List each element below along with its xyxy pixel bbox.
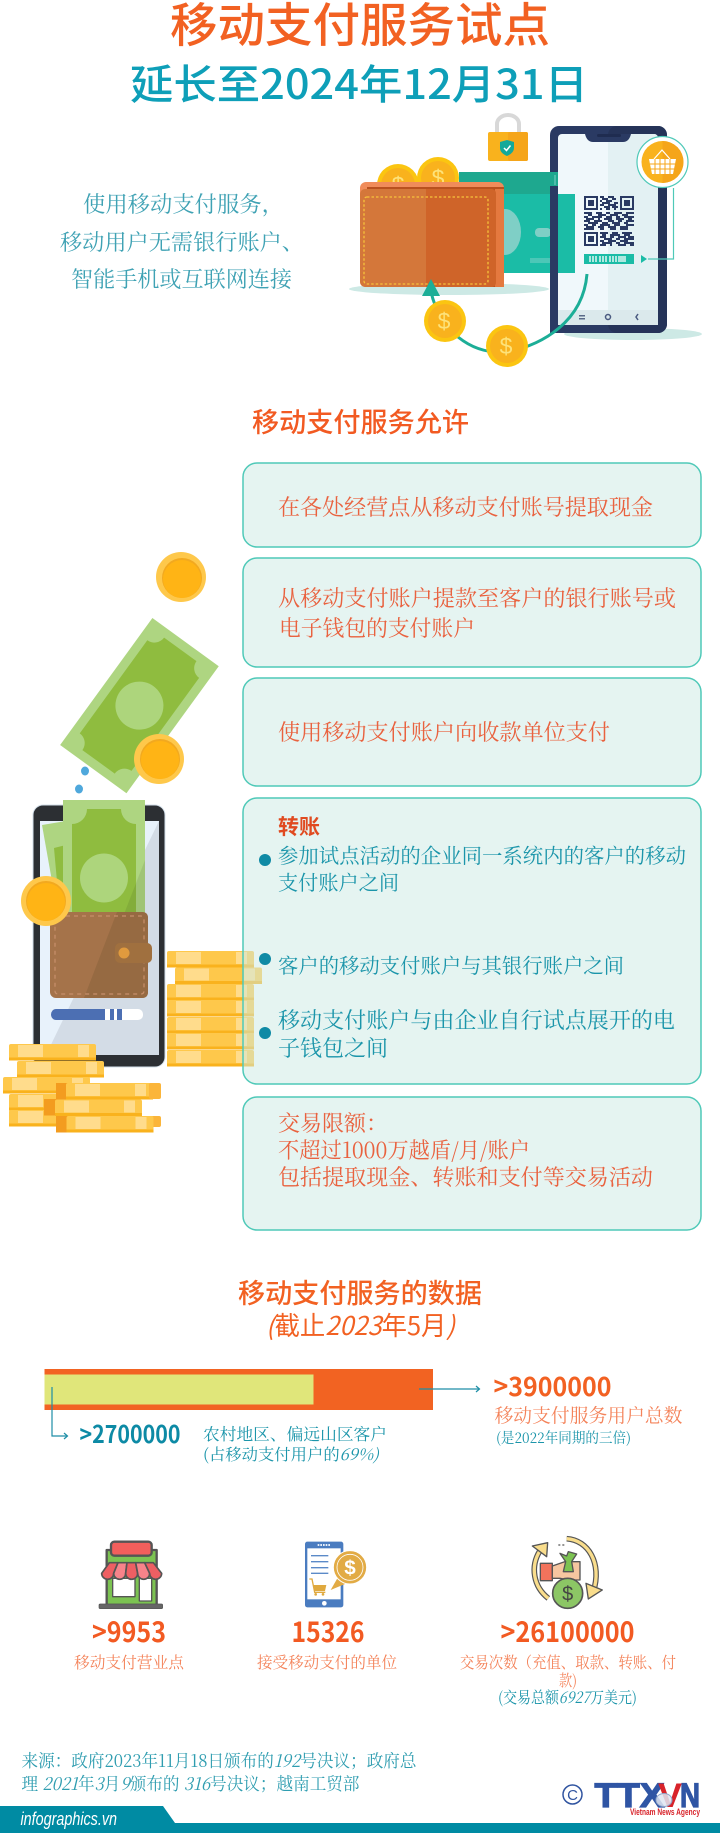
teal banknotes: [459, 172, 575, 333]
stat: total users: >3900000: [494, 1367, 612, 1404]
icon: coins in wallet: $: [392, 172, 405, 198]
QR code: [584, 196, 634, 246]
source note: [22, 1748, 417, 1796]
icon: store: [99, 1542, 163, 1609]
bullet item 1: 支付账户之间: [278, 866, 399, 896]
coin stack: left front: [44, 1083, 161, 1132]
icon: coins in wallet: $: [432, 165, 445, 191]
intro text: 智能手机或互联网连接: [71, 263, 293, 294]
stat: service points: 移动支付营业点: [74, 1651, 184, 1673]
source note: 来源：政府2023年11月18日颁布的192号决议；政府总: [22, 1748, 417, 1773]
icon: phone with dollar bubble: [305, 1542, 367, 1607]
bullet item 1: [259, 839, 686, 896]
coin stack: left back: [3, 1044, 104, 1126]
icon: smartphone: [33, 805, 165, 1067]
icon: falling coin lower: [134, 734, 184, 784]
intro text: [60, 188, 304, 294]
icon: dollar coins on arc: $: [500, 333, 513, 359]
icon: money bag cycle: $: [562, 1584, 573, 1606]
icon: falling banknote: [60, 618, 219, 793]
logo: TTXVN: [563, 1777, 700, 1817]
panel: pay merchants: [243, 678, 701, 786]
stat: transactions: 款): [559, 1669, 577, 1691]
bullet item 2: 客户的移动支付账户与其银行账户之间: [278, 949, 624, 979]
stat: service points: >9953: [92, 1611, 166, 1651]
barcode: [584, 254, 634, 264]
logo: TTXVN: TTX: [594, 1777, 665, 1815]
panel: transfers: [243, 798, 701, 1084]
bar chart: users: [44, 1369, 480, 1439]
source note: 理 2021年3月9颁布的 316号决议；越南工贸部: [22, 1771, 360, 1796]
stat: total users: 移动支付服务用户总数: [494, 1401, 682, 1428]
icon: blue drops: [75, 766, 89, 794]
logo: TTXVN: C: [567, 1787, 578, 1804]
icon: falling coin top: [156, 552, 206, 602]
icon: banknotes in wallet: [42, 800, 145, 915]
icon: shopping basket badge: [637, 136, 688, 188]
bullet item 3: 移动支付账户与由企业自行试点展开的电: [278, 1004, 675, 1035]
icon: padlock: [488, 115, 528, 161]
label: transfers: 转账: [278, 811, 320, 841]
footer band: infographics.vn: [20, 1809, 117, 1829]
panel: transaction limit: 不超过1000万越盾/月/账户: [278, 1134, 530, 1165]
stat: accepting merchants: 接受移动支付的单位: [257, 1651, 397, 1673]
panel: withdraw cash: [243, 463, 701, 547]
stat: rural users: 农村地区、偏远山区客户: [203, 1421, 387, 1445]
bullet item 1: 参加试点活动的企业同一系统内的客户的移动: [278, 839, 686, 869]
panel: transaction limit: 交易限额：: [278, 1107, 388, 1138]
stat: rural users: [80, 1415, 387, 1465]
stat: accepting merchants: [257, 1611, 397, 1673]
connector from basket to barcode: [641, 188, 674, 263]
panel: pay merchants: 使用移动支付账户向收款单位支付: [278, 716, 610, 747]
logo: TTXVN: V: [658, 1777, 682, 1815]
icon: orange wallet: [360, 182, 504, 287]
bullet item 3: 子钱包之间: [278, 1032, 388, 1063]
arrow: total users: [419, 1386, 480, 1392]
icon: brown wallet: [50, 912, 152, 998]
stat: total users: (是2022年同期的三倍): [496, 1427, 631, 1448]
stat: service points: [74, 1611, 184, 1673]
stat: total users: [494, 1367, 682, 1448]
icon: phone with dollar bubble: $: [344, 1557, 356, 1580]
panel: transfer to bank: [243, 558, 701, 667]
intro text: 移动用户无需银行账户、: [60, 226, 304, 257]
stat: rural users: >2700000: [80, 1415, 180, 1450]
heading: allowed services: 移动支付服务允许: [252, 401, 469, 440]
icon: dollar coins on arc: [424, 300, 528, 367]
stat: accepting merchants: 15326: [292, 1611, 364, 1651]
icon: coin beside phone: [21, 876, 71, 926]
stat: transactions: >26100000: [500, 1611, 634, 1651]
heading: service data: 移动支付服务的数据: [238, 1272, 482, 1311]
stat: transactions: [460, 1611, 676, 1708]
arrow: rural users: [52, 1387, 68, 1439]
stat: transactions: 交易次数（充值、取款、转账、付: [460, 1651, 676, 1673]
progress bar: [51, 1009, 143, 1020]
arrow: payment arc: [422, 274, 587, 352]
intro text: 使用移动支付服务，: [83, 188, 284, 219]
footer band: [0, 1806, 720, 1833]
coin stack: right: [167, 951, 262, 1066]
icon: smartphone: [550, 126, 667, 333]
panel: transfer to bank: 从移动支付账户提款至客户的银行账号或: [278, 582, 676, 613]
panel: withdraw cash: 在各处经营点从移动支付账号提取现金: [278, 491, 653, 522]
stat: rural users: (占移动支付用户的69%): [203, 1442, 380, 1465]
illustration: wallet and phone with QR payment: [349, 115, 702, 367]
bullet item 3: [259, 1004, 675, 1063]
panel: transaction limit: [243, 1097, 701, 1230]
illustration: phone, wallet, banknotes and coins: [3, 552, 262, 1132]
subheading: as of date: (截止2023年5月): [266, 1306, 456, 1343]
panel: transfer to bank: 电子钱包的支付账户: [279, 612, 475, 643]
icon: money bag cycle: [532, 1539, 602, 1608]
panel: transaction limit: 包括提取现金、转账和支付等交易活动: [278, 1161, 653, 1192]
icon: coins in wallet: [377, 157, 459, 206]
title line 2: 延长至2024年12月31日: [130, 51, 588, 111]
stat: transactions: (交易总额6927万美元): [498, 1686, 637, 1708]
icon: dollar coins on arc: $: [438, 308, 451, 334]
logo: TTXVN: N: [680, 1777, 700, 1815]
